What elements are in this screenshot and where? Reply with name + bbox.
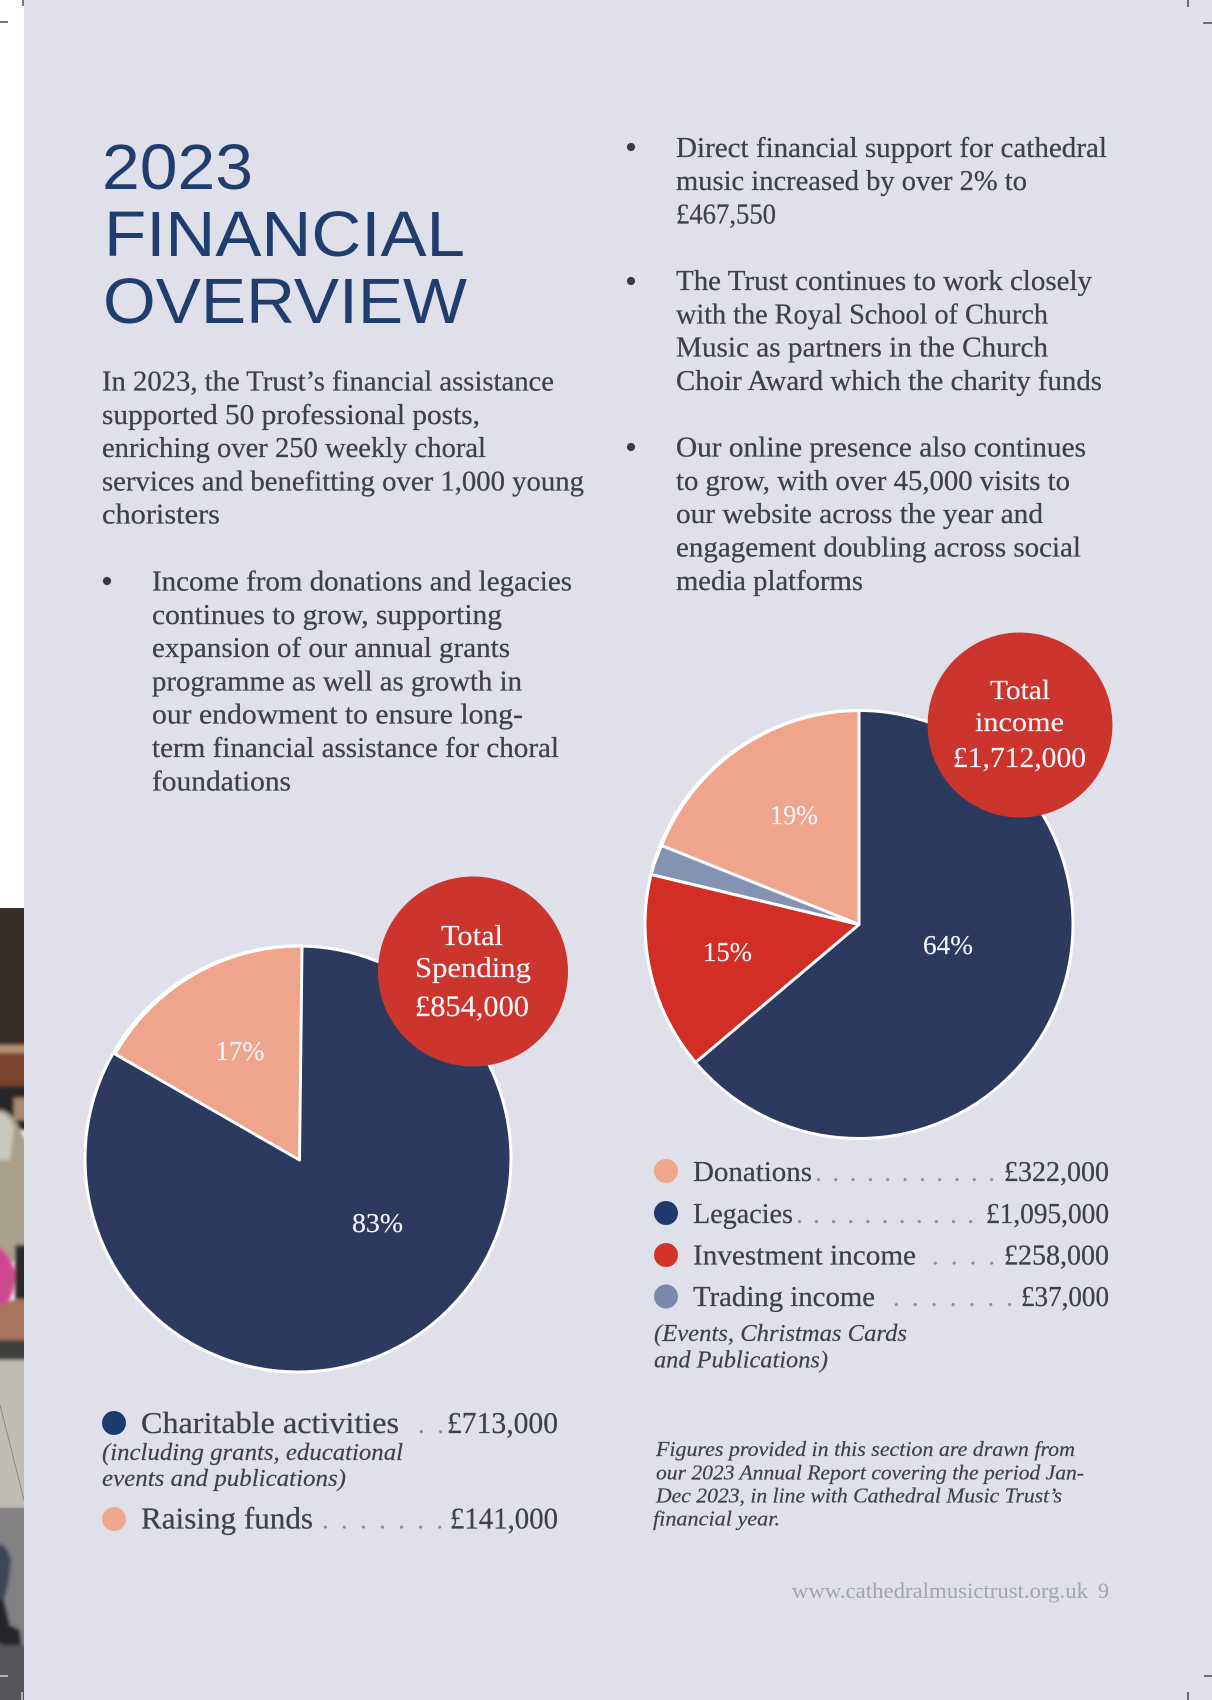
pie chart: income — [645, 710, 1073, 1138]
bullet: income from donations: foundations — [152, 766, 291, 798]
legend row: charitable activities: £713,000 — [447, 1405, 558, 1440]
bullet: direct financial support: £467,550 — [676, 200, 776, 230]
legend row: legacies: £1,095,000 — [986, 1199, 1109, 1230]
bullet: income from donations: our endowment to ensure long- — [152, 700, 523, 730]
legend row: trading income: £37,000 — [1021, 1282, 1109, 1313]
legend row: raising funds: £141,000 — [450, 1500, 558, 1536]
legend row: legacies: Legacies — [693, 1199, 793, 1230]
badge: total spending — [378, 876, 568, 1066]
bullet: royal school of church music: with the Royal School of Church — [676, 300, 1048, 330]
footnote: Dec 2023, in line with Cathedral Music Trust’s — [655, 1484, 1062, 1508]
legend row: donations: . . . . . . . . . . . — [815, 1157, 995, 1187]
label: donations share: 19% — [770, 800, 818, 830]
badge: total income: income — [975, 707, 1064, 737]
legend row: donations — [654, 1157, 1109, 1188]
bullet: direct financial support — [627, 133, 1107, 230]
trading income note: (Events, Christmas Cards — [654, 1321, 907, 1347]
legend row: investment income: Investment income — [693, 1240, 916, 1272]
intro paragraph: services and benefitting over 1,000 young — [102, 466, 584, 498]
bullet: income from donations — [103, 566, 572, 798]
intro paragraph: supported 50 professional posts, — [102, 400, 480, 431]
bullet: online presence: engagement doubling across social — [676, 532, 1081, 564]
label: charitable share: 83% — [352, 1208, 403, 1238]
legend row: legacies: . . . . . . . . . . . — [796, 1199, 974, 1229]
bullet: online presence: our website across the year and — [676, 499, 1043, 530]
trading income note: and Publications) — [654, 1348, 828, 1374]
legend row: charitable activities: Charitable activities — [141, 1405, 399, 1440]
title — [102, 131, 468, 337]
legend: income — [654, 1157, 1109, 1374]
charitable activities note — [102, 1440, 403, 1492]
legend row: investment income: . . . . — [932, 1240, 995, 1270]
intro paragraph: In 2023, the Trust’s financial assistance — [102, 366, 554, 398]
legend row: charitable activities: . . — [418, 1409, 444, 1439]
legend row: raising funds — [102, 1500, 558, 1536]
bullet: income from donations: Income from donations and legacies — [152, 566, 572, 598]
badge: total income: £1,712,000 — [953, 742, 1086, 774]
bullet: direct financial support: Direct financial support for cathedral — [676, 133, 1107, 164]
legend: spending — [102, 1405, 558, 1536]
intro paragraph: choristers — [102, 500, 220, 530]
bullet: online presence — [627, 432, 1086, 597]
label: legacies share: 64% — [923, 930, 973, 960]
bullet: income from donations: term financial assistance for choral — [152, 733, 559, 764]
footnote — [653, 1437, 1084, 1530]
footnote: our 2023 Annual Report covering the period Jan- — [656, 1460, 1084, 1484]
badge: total income — [928, 632, 1112, 818]
label: investment share: 15% — [703, 937, 752, 967]
badge: total spending: Spending — [415, 953, 531, 984]
legend row: raising funds: . . . . . . . — [322, 1504, 443, 1534]
bullet: direct financial support: music increased by over 2% to — [676, 166, 1027, 197]
footnote: Figures provided in this section are drawn from — [655, 1437, 1075, 1461]
label: raising funds share: 17% — [216, 1036, 264, 1066]
badge: total spending: £854,000 — [415, 990, 529, 1023]
bullet: online presence: Our online presence also continues — [676, 432, 1086, 464]
title: OVERVIEW — [103, 265, 468, 337]
bullet: royal school of church music — [627, 266, 1102, 397]
badge: total income: Total — [990, 675, 1050, 705]
title: FINANCIAL — [104, 198, 465, 270]
trading income note — [654, 1321, 907, 1374]
legend row: legacies — [654, 1199, 1109, 1230]
legend row: raising funds: Raising funds — [141, 1500, 313, 1536]
footer url and page number: 9 — [1098, 1578, 1109, 1603]
legend row: trading income: Trading income — [693, 1282, 875, 1313]
bullet: royal school of church music: Choir Award which the charity funds — [676, 366, 1102, 397]
legend row: donations: £322,000 — [1004, 1157, 1109, 1188]
footer url and page number: www.cathedralmusictrust.org.uk — [792, 1578, 1088, 1603]
bullet: income from donations: expansion of our annual grants — [152, 633, 510, 664]
photo strip at left edge — [0, 908, 24, 1700]
title: 2023 — [102, 131, 253, 203]
legend row: investment income: £258,000 — [1004, 1240, 1109, 1272]
legend row: trading income: . . . . . . . — [893, 1282, 1013, 1312]
footnote: financial year. — [653, 1506, 780, 1530]
legend row: charitable activities — [102, 1405, 558, 1440]
intro paragraph: enriching over 250 weekly choral — [102, 433, 486, 464]
bullet: income from donations: continues to grow, supporting — [152, 600, 502, 631]
legend row: donations: Donations — [693, 1157, 812, 1188]
charitable activities note: events and publications) — [102, 1466, 346, 1492]
badge: total spending: Total — [441, 921, 503, 952]
charitable activities note: (including grants, educational — [102, 1440, 403, 1466]
bullet: online presence: media platforms — [676, 566, 863, 597]
bullet: royal school of church music: Music as partners in the Church — [676, 332, 1048, 364]
pie chart: spending — [85, 946, 511, 1372]
bullet: royal school of church music: The Trust continues to work closely — [676, 266, 1092, 297]
bullet: income from donations: programme as well as growth in — [152, 666, 522, 698]
bullet: online presence: to grow, with over 45,000 visits to — [676, 466, 1070, 497]
legend row: investment income — [654, 1240, 1109, 1272]
legend row: trading income — [654, 1282, 1109, 1313]
intro paragraph — [102, 366, 584, 530]
